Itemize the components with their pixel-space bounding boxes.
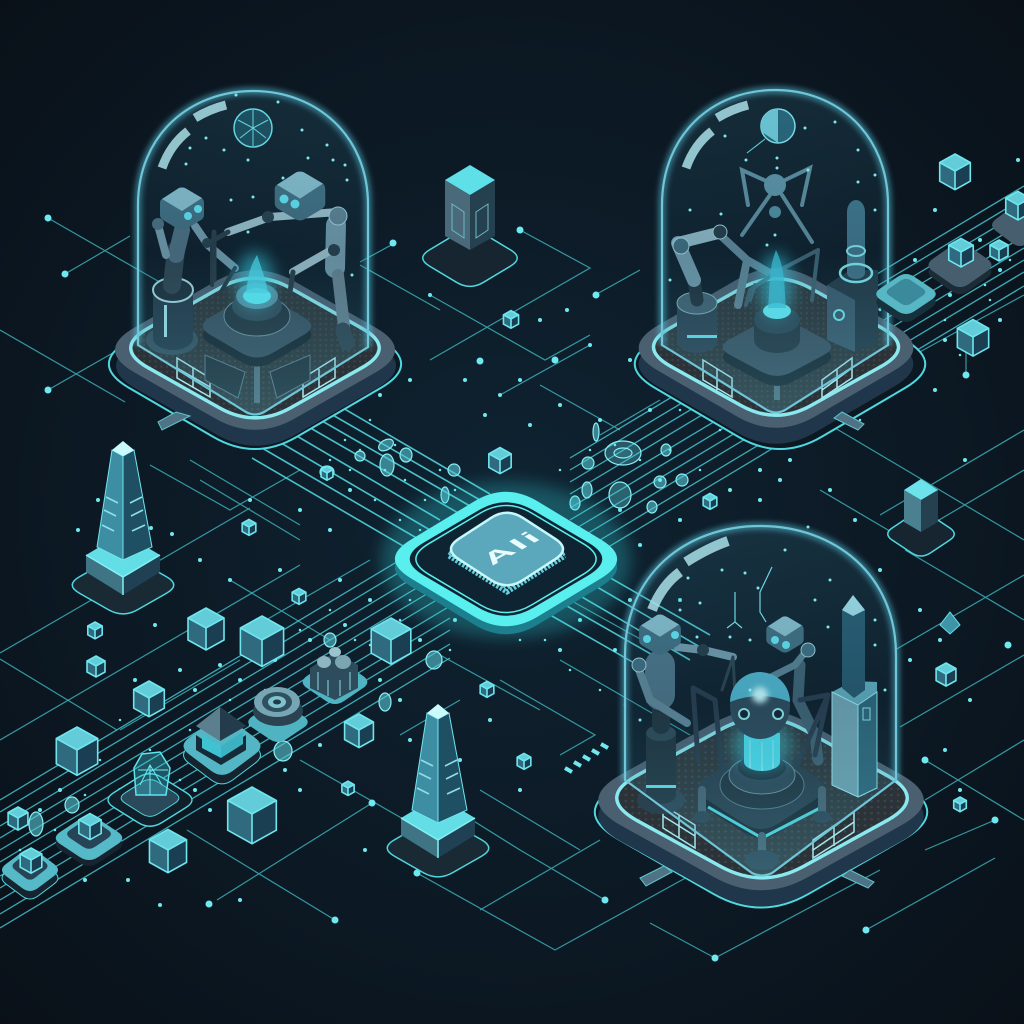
- icon: AI chip: [381, 482, 631, 638]
- glass dome: [138, 91, 368, 414]
- cubes: [8, 154, 989, 873]
- pyramid node: [184, 707, 260, 784]
- robotic arm: [673, 225, 768, 305]
- arm pedestal: [677, 292, 717, 353]
- striped marker: [565, 744, 608, 772]
- chip cluster node: [303, 647, 367, 704]
- dome lab: top right: [635, 90, 925, 449]
- pedestal: [146, 278, 198, 355]
- obelisk: center bottom: [387, 704, 489, 877]
- robot left: [152, 188, 235, 290]
- central machine: [723, 250, 831, 400]
- ring node: [248, 687, 308, 742]
- platform: [595, 710, 927, 908]
- dome particles: [186, 95, 352, 275]
- platform: [635, 268, 925, 449]
- chip label: AIi: [475, 527, 548, 569]
- central machine: [693, 672, 831, 870]
- tower: [832, 595, 877, 797]
- left pedestal robot: [632, 614, 735, 814]
- dome highlights: [162, 105, 226, 168]
- stepped node: far left: [2, 848, 58, 899]
- hologram node: [108, 752, 192, 826]
- small pyramid marker: [940, 612, 960, 634]
- dome particles: [670, 122, 875, 280]
- chip pins: [449, 552, 565, 592]
- chip top: [451, 513, 563, 585]
- circuit band: upper left to lower right: [252, 404, 710, 672]
- dome wires: [727, 567, 772, 628]
- spider drone: [742, 168, 818, 305]
- dome lab: bottom right: [595, 526, 927, 908]
- dome highlights: [652, 541, 728, 610]
- right band nodes: [876, 191, 1024, 322]
- floor windows: [663, 805, 854, 858]
- glass dome: [625, 526, 896, 876]
- floor windows: [703, 358, 852, 398]
- central machine: [203, 252, 311, 403]
- dome particles: [640, 527, 885, 720]
- robot right: [214, 172, 347, 343]
- obelisk: left: [72, 441, 174, 614]
- data nodes: [20, 160, 1018, 958]
- pod: right: [888, 479, 954, 556]
- circuit components: [29, 423, 688, 836]
- orb: [234, 109, 272, 147]
- glass dome: [662, 90, 888, 412]
- platform: [109, 270, 401, 449]
- pillar: [827, 200, 878, 352]
- dome lab: top left: [109, 91, 401, 449]
- stepped node: second: [56, 814, 122, 866]
- moon orb: [747, 109, 795, 153]
- dome highlights: [686, 105, 748, 168]
- circuit band: lower left to upper right: [0, 186, 1024, 928]
- floor windows: [177, 358, 335, 397]
- pod: top center: [423, 165, 517, 286]
- right robot: [765, 616, 818, 760]
- network lines: [0, 218, 1024, 958]
